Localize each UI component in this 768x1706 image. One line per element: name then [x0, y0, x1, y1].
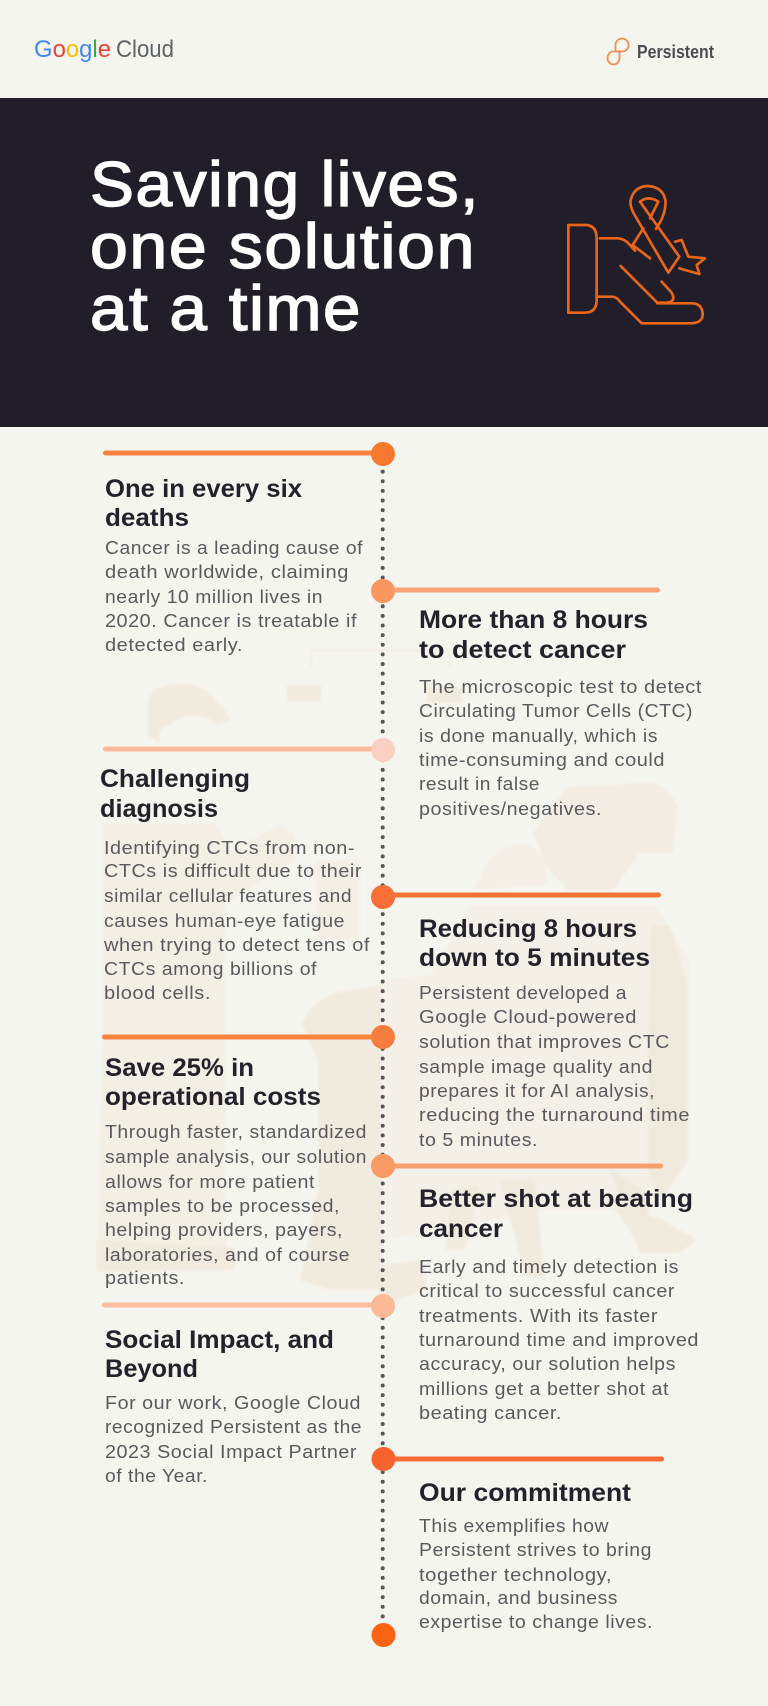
body text: when trying to detect tens of — [103, 935, 371, 955]
right figure robe band — [648, 925, 687, 1200]
body text: expertise to change lives. — [419, 1612, 653, 1632]
heading: diagnosis — [100, 795, 218, 823]
body text: The microscopic test to detect — [419, 677, 702, 697]
body text: prepares it for AI analysis, — [419, 1081, 655, 1101]
iv bag right — [427, 687, 462, 703]
icon: hand holding awareness ribbon — [568, 186, 705, 323]
timeline end node — [372, 1623, 396, 1647]
body text: Identifying CTCs from non- — [104, 838, 355, 858]
heading — [105, 475, 302, 532]
heading — [100, 765, 250, 823]
body text: to 5 minutes. — [419, 1130, 538, 1150]
heading: deaths — [105, 504, 189, 532]
body text: millions get a better shot at — [419, 1379, 669, 1399]
body text — [105, 538, 364, 655]
body text: CTCs is difficult due to their — [104, 861, 362, 881]
body text: treatments. With its faster — [419, 1306, 658, 1326]
body text: Persistent developed a — [419, 983, 628, 1003]
body text: Through faster, standardized — [105, 1122, 367, 1142]
heading: to detect cancer — [419, 636, 626, 664]
body text: blood cells. — [104, 983, 211, 1003]
right figure torso — [533, 783, 677, 890]
body text: turnaround time and improved — [419, 1330, 699, 1350]
body text: time-consuming and could — [419, 750, 665, 770]
body text: 2023 Social Impact Partner — [105, 1442, 357, 1462]
panel: social impact and beyond — [102, 1294, 395, 1486]
body text: similar cellular features and — [104, 886, 352, 906]
body text: together technology, — [419, 1565, 612, 1585]
heading: Better shot at beating — [419, 1185, 693, 1213]
body text — [419, 677, 702, 819]
body text: beating cancer. — [419, 1403, 562, 1423]
body text: is done manually, which is — [419, 726, 658, 746]
connector and node — [103, 442, 395, 466]
body text: death worldwide, claiming — [105, 562, 349, 582]
heading: Our commitment — [419, 1479, 632, 1507]
body text: sample analysis, our solution — [105, 1147, 367, 1167]
logo: Google Cloud — [34, 36, 174, 63]
connector and node — [371, 885, 661, 909]
connector and node — [102, 1294, 395, 1318]
header band — [0, 98, 768, 427]
body text — [419, 1257, 699, 1423]
body text: critical to successful cancer — [419, 1281, 675, 1301]
body text: Circulating Tumor Cells (CTC) — [419, 701, 693, 721]
body text: Early and timely detection is — [419, 1257, 679, 1277]
body text: nearly 10 million lives in — [105, 587, 323, 607]
left figure hair — [148, 683, 232, 743]
body text: patients. — [105, 1268, 185, 1288]
logo: Persistent: Persistent — [637, 42, 714, 62]
body text — [105, 1393, 362, 1486]
body text: This exemplifies how — [419, 1516, 610, 1536]
panel: challenging diagnosis — [100, 738, 395, 1003]
connector and node — [371, 579, 660, 603]
heading: One in every six — [105, 475, 302, 503]
child head and body — [300, 985, 382, 1290]
body text: Google Cloud-powered — [419, 1007, 637, 1027]
panel: save 25% in operational costs — [102, 1025, 395, 1288]
heading: More than 8 hours — [419, 606, 648, 634]
body text: causes human-eye fatigue — [104, 911, 345, 931]
logo: Google Cloud: Cloud — [116, 36, 174, 63]
body text — [105, 1122, 367, 1288]
heading: down to 5 minutes — [419, 944, 650, 972]
connector and node — [103, 738, 395, 762]
heading: Beyond — [105, 1355, 198, 1383]
body text — [419, 983, 690, 1150]
body text: of the Year. — [105, 1466, 208, 1486]
iv bag left — [287, 685, 321, 702]
heading — [419, 1185, 693, 1243]
timeline dotted spine — [381, 462, 385, 1630]
heading: operational costs — [105, 1083, 321, 1111]
heading — [105, 1054, 321, 1111]
body text — [419, 1516, 653, 1632]
connector and node — [372, 1447, 664, 1471]
body text: samples to be processed, — [105, 1196, 340, 1216]
panel: one in every six deaths — [103, 442, 395, 655]
panel: better shot at beating cancer — [371, 1154, 699, 1423]
title: one solution — [90, 212, 476, 282]
heading: cancer — [419, 1215, 503, 1243]
body text: 2020. Cancer is treatable if — [105, 611, 358, 631]
title: at a time — [90, 274, 362, 344]
heading — [419, 915, 650, 972]
body text: accuracy, our solution helps — [419, 1354, 676, 1374]
body text: result in false — [419, 774, 540, 794]
right figure head — [472, 843, 548, 890]
body text: sample image quality and — [419, 1057, 653, 1077]
panel: reducing 8 hours — [371, 885, 690, 1150]
icon: infinity knot — [608, 38, 629, 64]
body text: helping providers, payers, — [105, 1220, 343, 1240]
body text: recognized Persistent as the — [105, 1417, 362, 1437]
panel: more than 8 hours — [371, 579, 702, 819]
lower chair base — [380, 1260, 428, 1305]
heading — [419, 606, 648, 664]
body text: Cancer is a leading cause of — [105, 538, 364, 558]
body text: Persistent strives to bring — [419, 1540, 652, 1560]
body text: solution that improves CTC — [419, 1032, 670, 1052]
body text: laboratories, and of course — [105, 1245, 350, 1265]
faint background illustration: doctor and patient — [97, 650, 697, 1305]
heading: Social Impact, and — [105, 1326, 334, 1354]
right figure legs — [500, 1180, 545, 1280]
logo: Persistent — [608, 38, 714, 64]
body text: positives/negatives. — [419, 799, 602, 819]
connector and node — [102, 1025, 395, 1049]
heading — [105, 1326, 334, 1383]
title: Saving lives, — [90, 150, 480, 220]
body text: reducing the turnaround time — [419, 1105, 690, 1125]
body text: For our work, Google Cloud — [105, 1393, 361, 1413]
body text: CTCs among billions of — [104, 959, 318, 979]
body text: domain, and business — [419, 1588, 618, 1608]
heading: Save 25% in — [105, 1054, 254, 1082]
body text: detected early. — [105, 635, 243, 655]
heading: Challenging — [100, 765, 250, 793]
panel: our commitment — [372, 1447, 664, 1632]
right figure lower body — [385, 905, 690, 1240]
body text — [103, 838, 371, 1003]
chair — [316, 860, 360, 940]
body text: allows for more patient — [105, 1172, 315, 1192]
left figure coat — [97, 823, 296, 1272]
heading: Reducing 8 hours — [419, 915, 637, 943]
logo: Google Cloud: Google — [34, 36, 111, 63]
title — [90, 150, 480, 344]
connector and node — [371, 1154, 663, 1178]
iv stand frame — [311, 650, 450, 668]
